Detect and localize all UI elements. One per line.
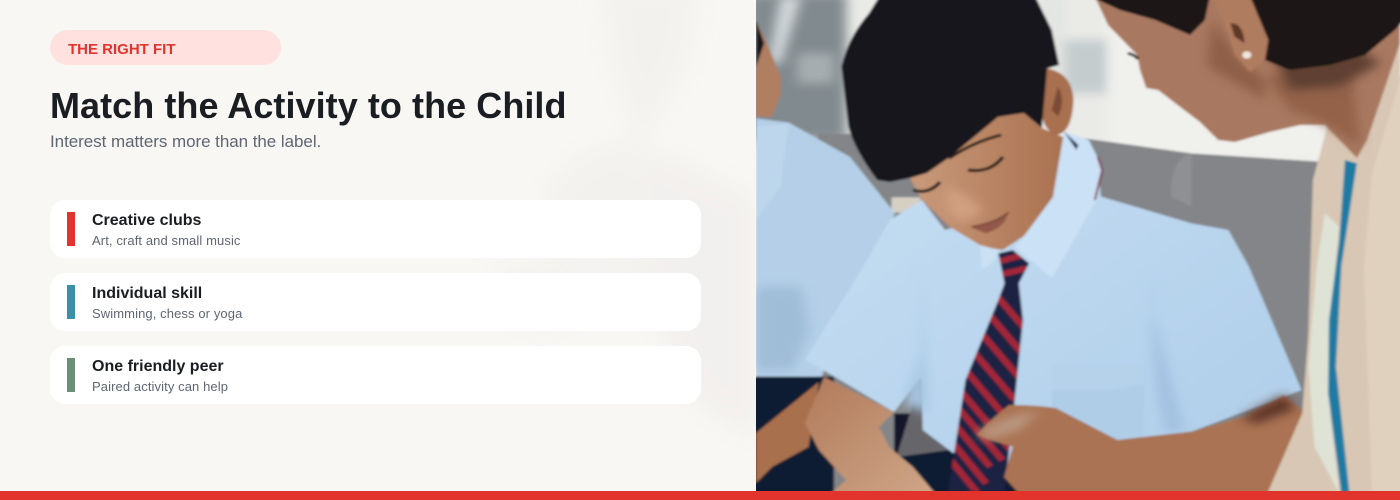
left boy trousers and arm <box>752 377 834 497</box>
boy hair <box>841 0 1059 182</box>
badge: the right fit: THE RIGHT FIT <box>68 41 176 58</box>
accent bar: teal <box>67 285 75 319</box>
card description: Art, craft and small music <box>92 233 241 248</box>
card heading: One friendly peer <box>92 358 224 375</box>
boy face <box>910 113 1063 250</box>
boy collar <box>1015 132 1102 278</box>
accent bar: green <box>67 358 75 392</box>
boy left arm <box>805 377 935 493</box>
card description: Paired activity can help <box>92 379 228 394</box>
sofa <box>756 133 1323 493</box>
boy shirt <box>805 133 1301 493</box>
teacher forearm and hand <box>977 395 1302 493</box>
boy tie <box>948 249 1030 491</box>
boy ear <box>1042 68 1073 135</box>
room background <box>748 0 1400 500</box>
teacher ear and earring <box>1212 0 1268 72</box>
card heading: Individual skill <box>92 285 202 302</box>
card: individual skill <box>50 273 701 331</box>
card: creative clubs <box>50 200 701 258</box>
badge: the right fit <box>50 30 281 65</box>
card description: Swimming, chess or yoga <box>92 306 242 321</box>
footer bar <box>0 491 1400 500</box>
panel: left content <box>0 0 756 500</box>
left boy <box>756 20 781 117</box>
faded background photo <box>0 0 756 500</box>
subtitle: Interest matters more than the label. <box>50 132 321 151</box>
boy trousers <box>896 450 1052 493</box>
card heading: Creative clubs <box>92 212 201 229</box>
accent bar: red <box>67 212 75 246</box>
boy neck shadow <box>1003 137 1077 250</box>
teacher face and neck <box>1095 0 1400 158</box>
teacher cardigan and top <box>1267 43 1400 493</box>
card: one friendly peer <box>50 346 701 404</box>
teacher hair <box>1091 0 1400 70</box>
photo: boy in school uniform with teacher <box>756 0 1400 491</box>
title: Match the Activity to the Child <box>50 85 567 126</box>
